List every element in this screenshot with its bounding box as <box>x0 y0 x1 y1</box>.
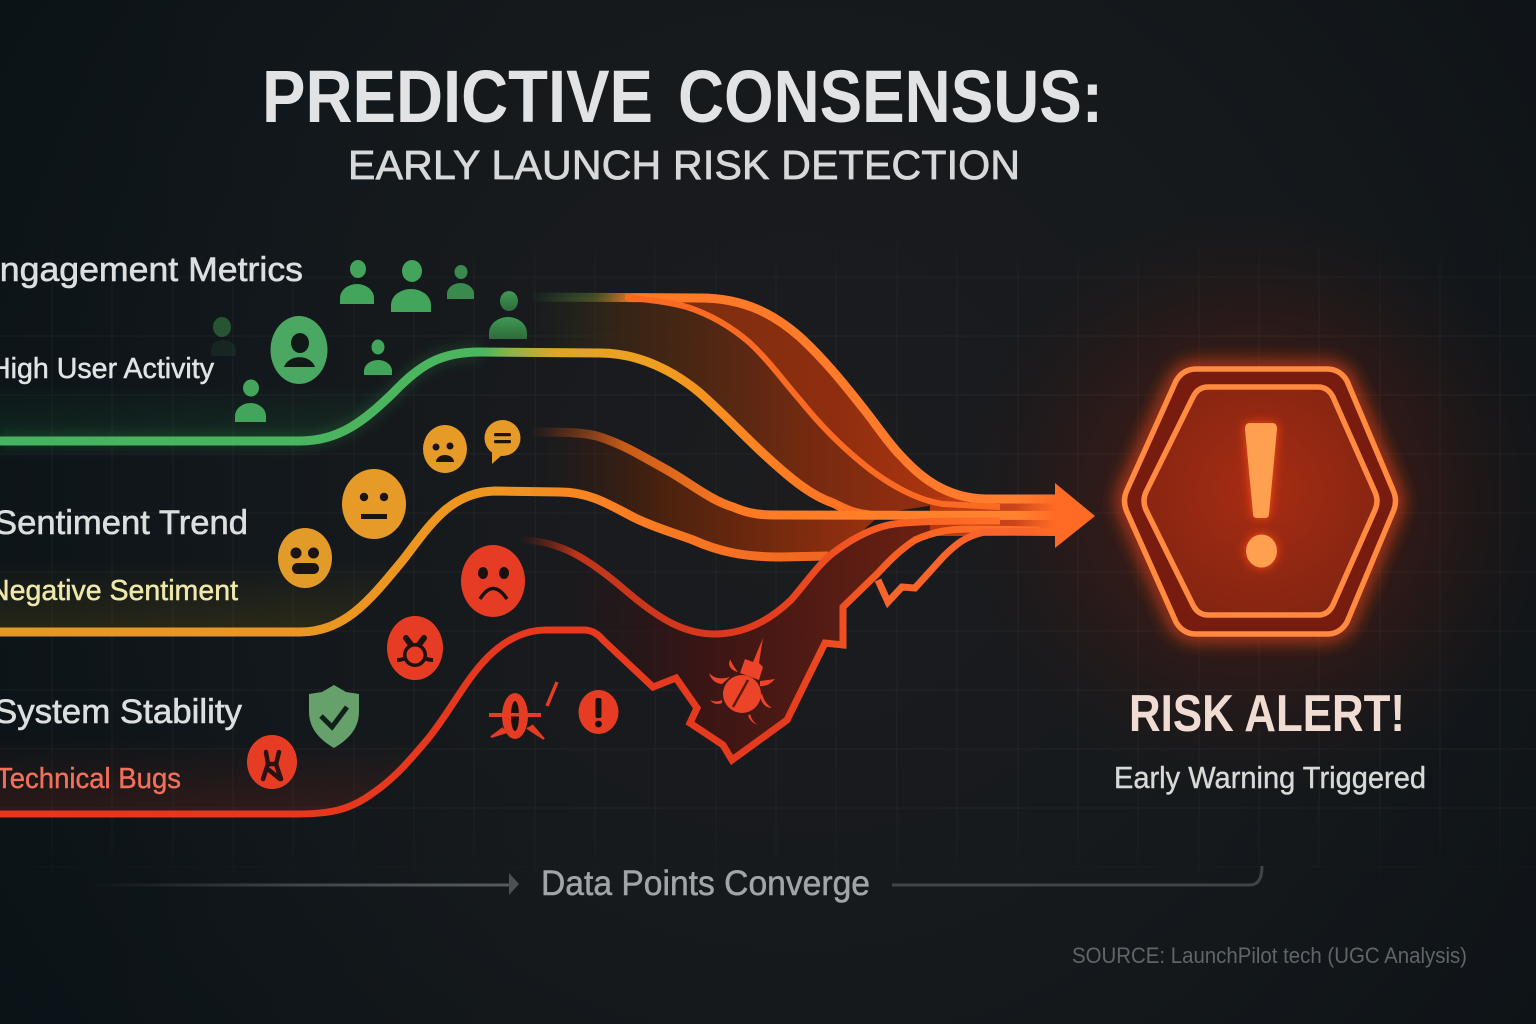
title <box>262 55 1103 138</box>
icon: worried face <box>423 425 467 473</box>
flow line: stability lower red jagged <box>0 529 1040 814</box>
label: technical bugs: Technical Bugs <box>0 763 181 795</box>
icon: faded user <box>211 317 236 356</box>
flow line: engagement green to yellow <box>0 352 870 515</box>
icon: user 4 <box>489 291 527 339</box>
icon: hexagon risk alert <box>1124 369 1396 634</box>
icon: bug in circle <box>387 616 443 680</box>
icon: bug symbol <box>489 693 544 739</box>
risk alert heading: RISK ALERT! <box>1129 685 1405 743</box>
icon: neutral face <box>342 469 406 539</box>
icon: user 6 <box>235 380 266 422</box>
arrow: data points left line <box>90 873 519 895</box>
subtitle: EARLY LAUNCH RISK DETECTION <box>348 142 1020 188</box>
label: sentiment trend: Sentiment Trend <box>0 504 248 542</box>
icon: user 2 <box>391 260 431 312</box>
icon: shield check <box>309 685 359 748</box>
icon: large bug <box>709 638 775 725</box>
flow line: sentiment upper edge <box>530 432 1056 516</box>
icon: x circle <box>247 735 297 789</box>
icons: sentiment faces <box>278 420 525 617</box>
label: system stability: System Stability <box>0 693 242 731</box>
arrow: data points right line <box>892 866 1262 885</box>
flow line: sentiment orange <box>0 491 828 632</box>
flow line: engagement inner edge <box>625 297 1000 507</box>
icons: stability <box>247 616 775 789</box>
title: CONSENSUS: <box>678 55 1103 138</box>
arrow: converged risk arrow <box>930 483 1095 548</box>
icons: users <box>211 260 527 422</box>
flow line: engagement upper edge <box>530 297 1056 499</box>
icon: user 5 <box>364 340 392 375</box>
icon: grimace face <box>278 528 332 588</box>
icon: exclamation circle <box>578 690 618 734</box>
icon: user 3 <box>447 265 474 299</box>
arrow head blend <box>1015 495 1056 536</box>
icon: user 1 <box>340 260 374 304</box>
icon: large user badge <box>270 316 328 384</box>
source note: SOURCE: LaunchPilot tech (UGC Analysis) <box>1072 943 1467 968</box>
icon: slash mark <box>547 682 557 706</box>
flow line: stability upper red <box>520 521 1000 634</box>
flow area fills <box>0 297 980 814</box>
risk alert subtext: Early Warning Triggered <box>1114 760 1426 795</box>
caption: data points converge: Data Points Converge <box>541 864 870 903</box>
flow line: broken red branch <box>878 531 1056 602</box>
title: PREDICTIVE <box>262 55 653 138</box>
icon: sad red face <box>461 545 525 617</box>
icon: speech bubble <box>484 420 520 464</box>
